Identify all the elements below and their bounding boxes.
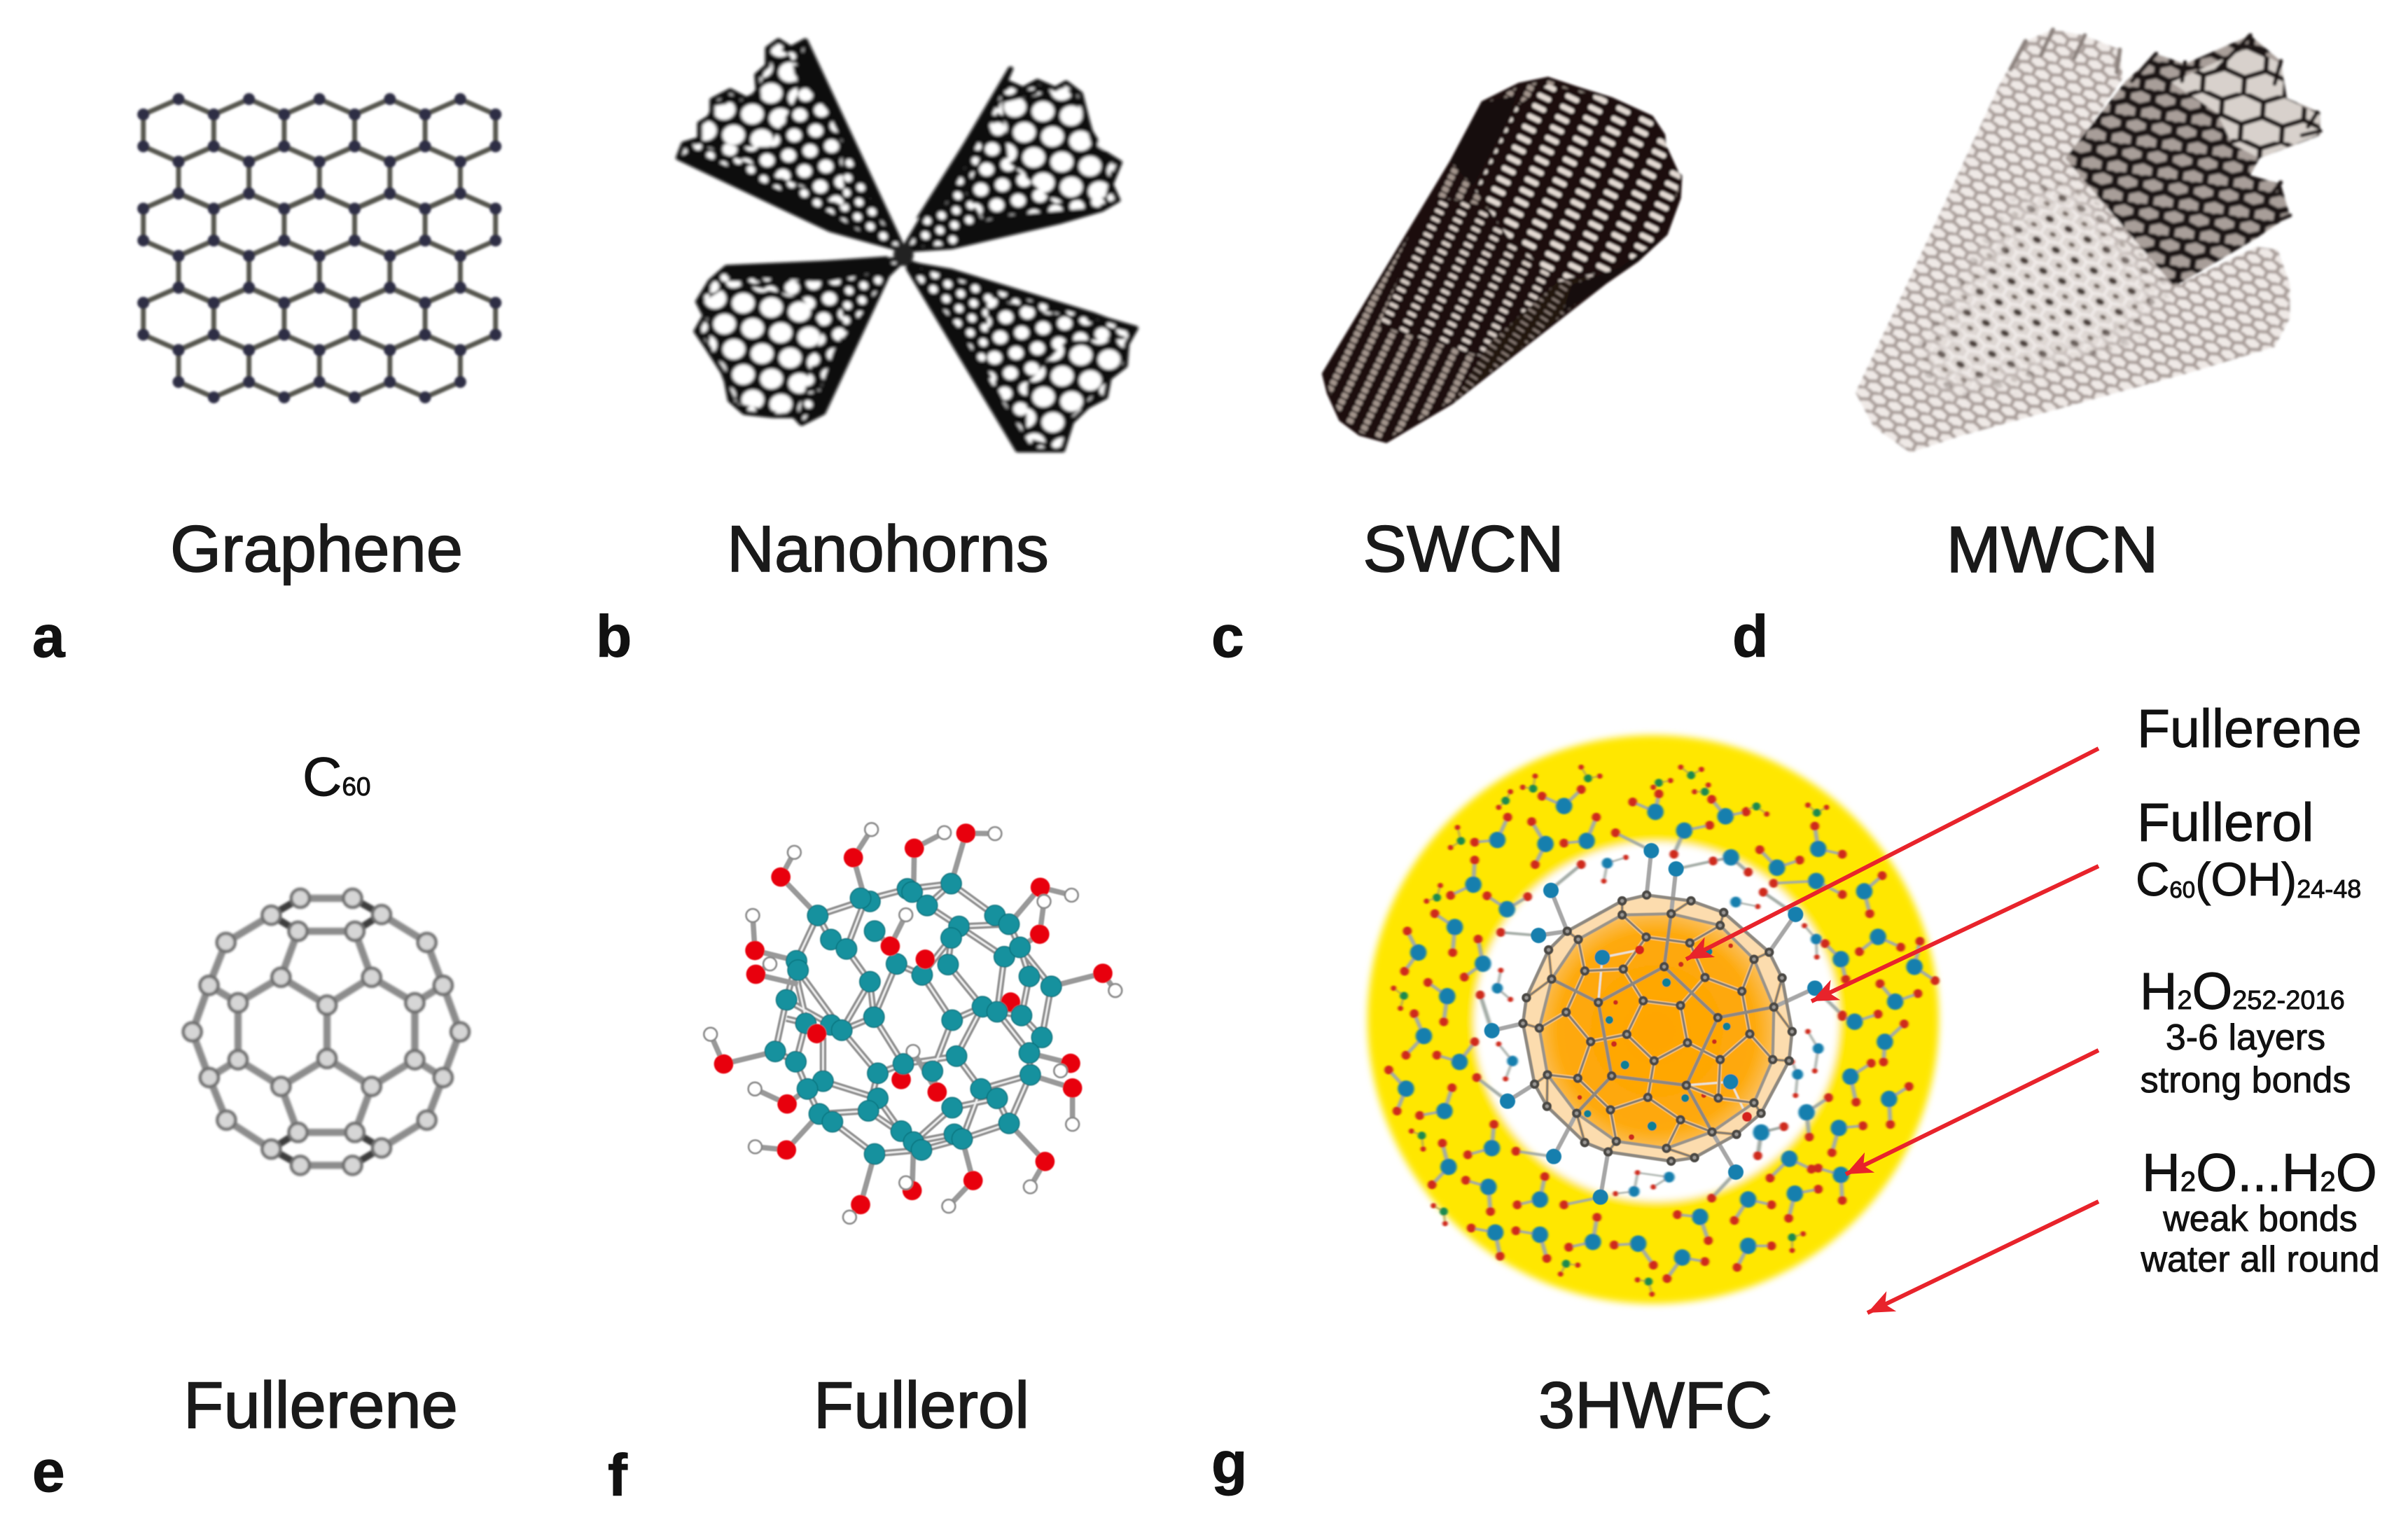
outer light wall (1856, 29, 2290, 452)
tube shadow patches (1452, 95, 1666, 314)
callout: H2O...H2O: H2O...H2O (2142, 1143, 2377, 1203)
panel letter f: f (608, 1442, 628, 1508)
top open hexagons (2171, 47, 2320, 158)
tube open end (1475, 85, 1680, 280)
3HWFC diagram (1367, 735, 2099, 1313)
nanohorn junction (893, 244, 914, 266)
hydroxyl hydrogen atoms (711, 830, 1115, 1217)
hydroxyl bonds (711, 830, 1115, 1217)
nanohorns cluster (678, 41, 1136, 450)
large water hydrogen atoms (1389, 790, 1935, 1279)
hydroxyl oxygen atoms (723, 833, 1103, 1204)
arrow to strong-bond layers (1846, 1050, 2099, 1174)
graphene lattice (144, 99, 496, 398)
arrow to surrounding water (1867, 1202, 2099, 1313)
tube dark lower edge (1454, 272, 1615, 401)
fullerene C60 molecule (193, 898, 460, 1165)
large water oxygen atoms (1406, 806, 1914, 1258)
carbon atoms (775, 884, 1051, 1154)
callout: C60(OH)24-48: (OH) (2195, 854, 2297, 906)
label: C60: C60 (302, 746, 371, 807)
core rim fill (1523, 895, 1792, 1161)
front water atoms on the core (1594, 945, 1752, 1122)
tube tip spikes (2010, 29, 2320, 227)
callout: C60(OH)24-48: C (2136, 854, 2169, 906)
carbon bonds (775, 884, 1051, 1154)
atoms seen through the cage (1578, 943, 1747, 1140)
water shells (1389, 767, 1935, 1294)
callout: 3-6 layers: 3-6 layers (2166, 1017, 2325, 1058)
panel letter e: e (32, 1438, 65, 1504)
label: MWCN: MWCN (1947, 513, 2158, 586)
outermost green water molecules (1393, 767, 1826, 1294)
label: SWCN: SWCN (1363, 512, 1564, 585)
bonds to inner waters (1492, 851, 1815, 1197)
arrow to fullerol shell (1811, 866, 2099, 1001)
panel letter g: g (1211, 1430, 1247, 1496)
label: Fullerol: Fullerol (814, 1368, 1029, 1442)
label: 3HWFC: 3HWFC (1538, 1368, 1772, 1442)
panel letter c: c (1211, 604, 1244, 669)
label: Nanohorns: Nanohorns (727, 512, 1049, 585)
label: Fullerene: Fullerene (183, 1368, 458, 1442)
callout: C60(OH)24-48: 24-48 (2297, 875, 2361, 903)
nanohorn upper left (678, 41, 903, 250)
large water bonds (1389, 790, 1935, 1279)
inner dark wall (2065, 35, 2320, 287)
yellow hydration ring (1367, 735, 1939, 1304)
tube body (1323, 78, 1680, 441)
callout: Fullerene: Fullerene (2137, 699, 2362, 759)
callout: Fullerol: Fullerol (2137, 793, 2313, 853)
nanohorn lower left (696, 256, 903, 424)
fullerol molecule (711, 830, 1115, 1217)
callout: C60(OH)24-48: 60 (2169, 877, 2195, 903)
orange core fill (1539, 914, 1774, 1148)
panel letter d: d (1732, 604, 1768, 669)
callout: weak bonds: weak bonds (2162, 1199, 2358, 1239)
middle speckled wall (1916, 167, 2169, 401)
nanohorn lower right (909, 263, 1136, 450)
label: Graphene: Graphene (170, 512, 463, 585)
arrow to fullerene core (1686, 748, 2099, 959)
multi-walled nanotube (1856, 29, 2320, 452)
fullerene core with cage (1492, 851, 1815, 1197)
small inner water molecules (1497, 858, 1818, 1194)
panel letter a: a (32, 604, 66, 669)
callout: strong bonds: strong bonds (2141, 1060, 2351, 1101)
panel letter b: b (596, 604, 632, 669)
tube middle band (1379, 195, 1615, 362)
nanohorn upper right (903, 69, 1120, 250)
callout: water all round: water all round (2140, 1239, 2380, 1280)
callout: H2O 252-2016: H2O252-2016 (2140, 962, 2345, 1020)
inner water oxygen atoms (1492, 851, 1815, 1197)
single-walled nanotube (1323, 78, 1680, 441)
cage bonds (1523, 895, 1792, 1161)
front oxygen atoms (817, 946, 937, 1092)
